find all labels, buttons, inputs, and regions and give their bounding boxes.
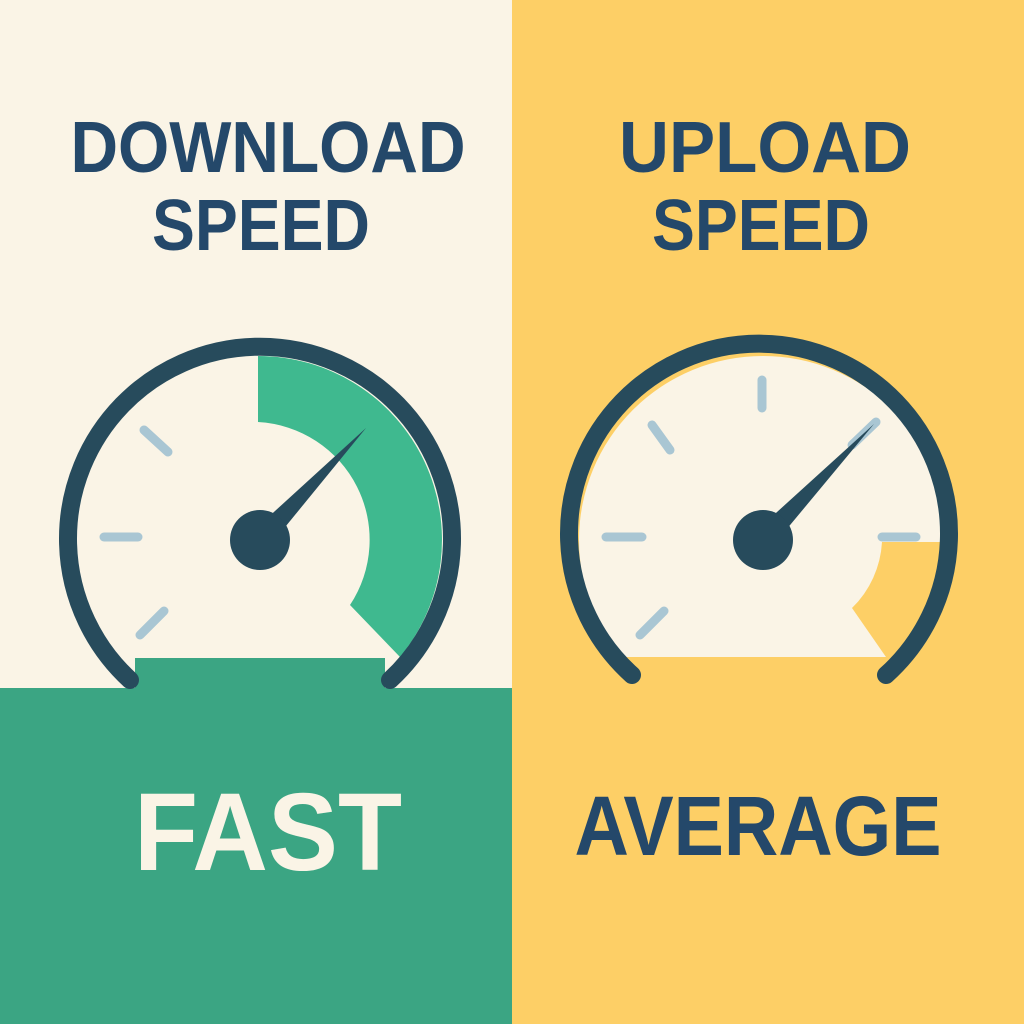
needle	[252, 428, 366, 548]
gauge: download	[68, 347, 452, 724]
title: upload speed: SPEED	[652, 186, 870, 266]
panel: upload	[512, 0, 1024, 1024]
title: upload speed	[619, 108, 911, 266]
title: download speed: DOWNLOAD	[70, 108, 466, 188]
title: download speed: SPEED	[152, 186, 370, 266]
title: upload speed: UPLOAD	[619, 108, 911, 188]
panel: download	[0, 0, 512, 1024]
title: download speed	[70, 108, 466, 266]
label: average: AVERAGE	[574, 779, 942, 873]
label: fast: FAST	[134, 771, 402, 894]
needle	[755, 424, 874, 548]
gauge: upload	[569, 344, 950, 724]
